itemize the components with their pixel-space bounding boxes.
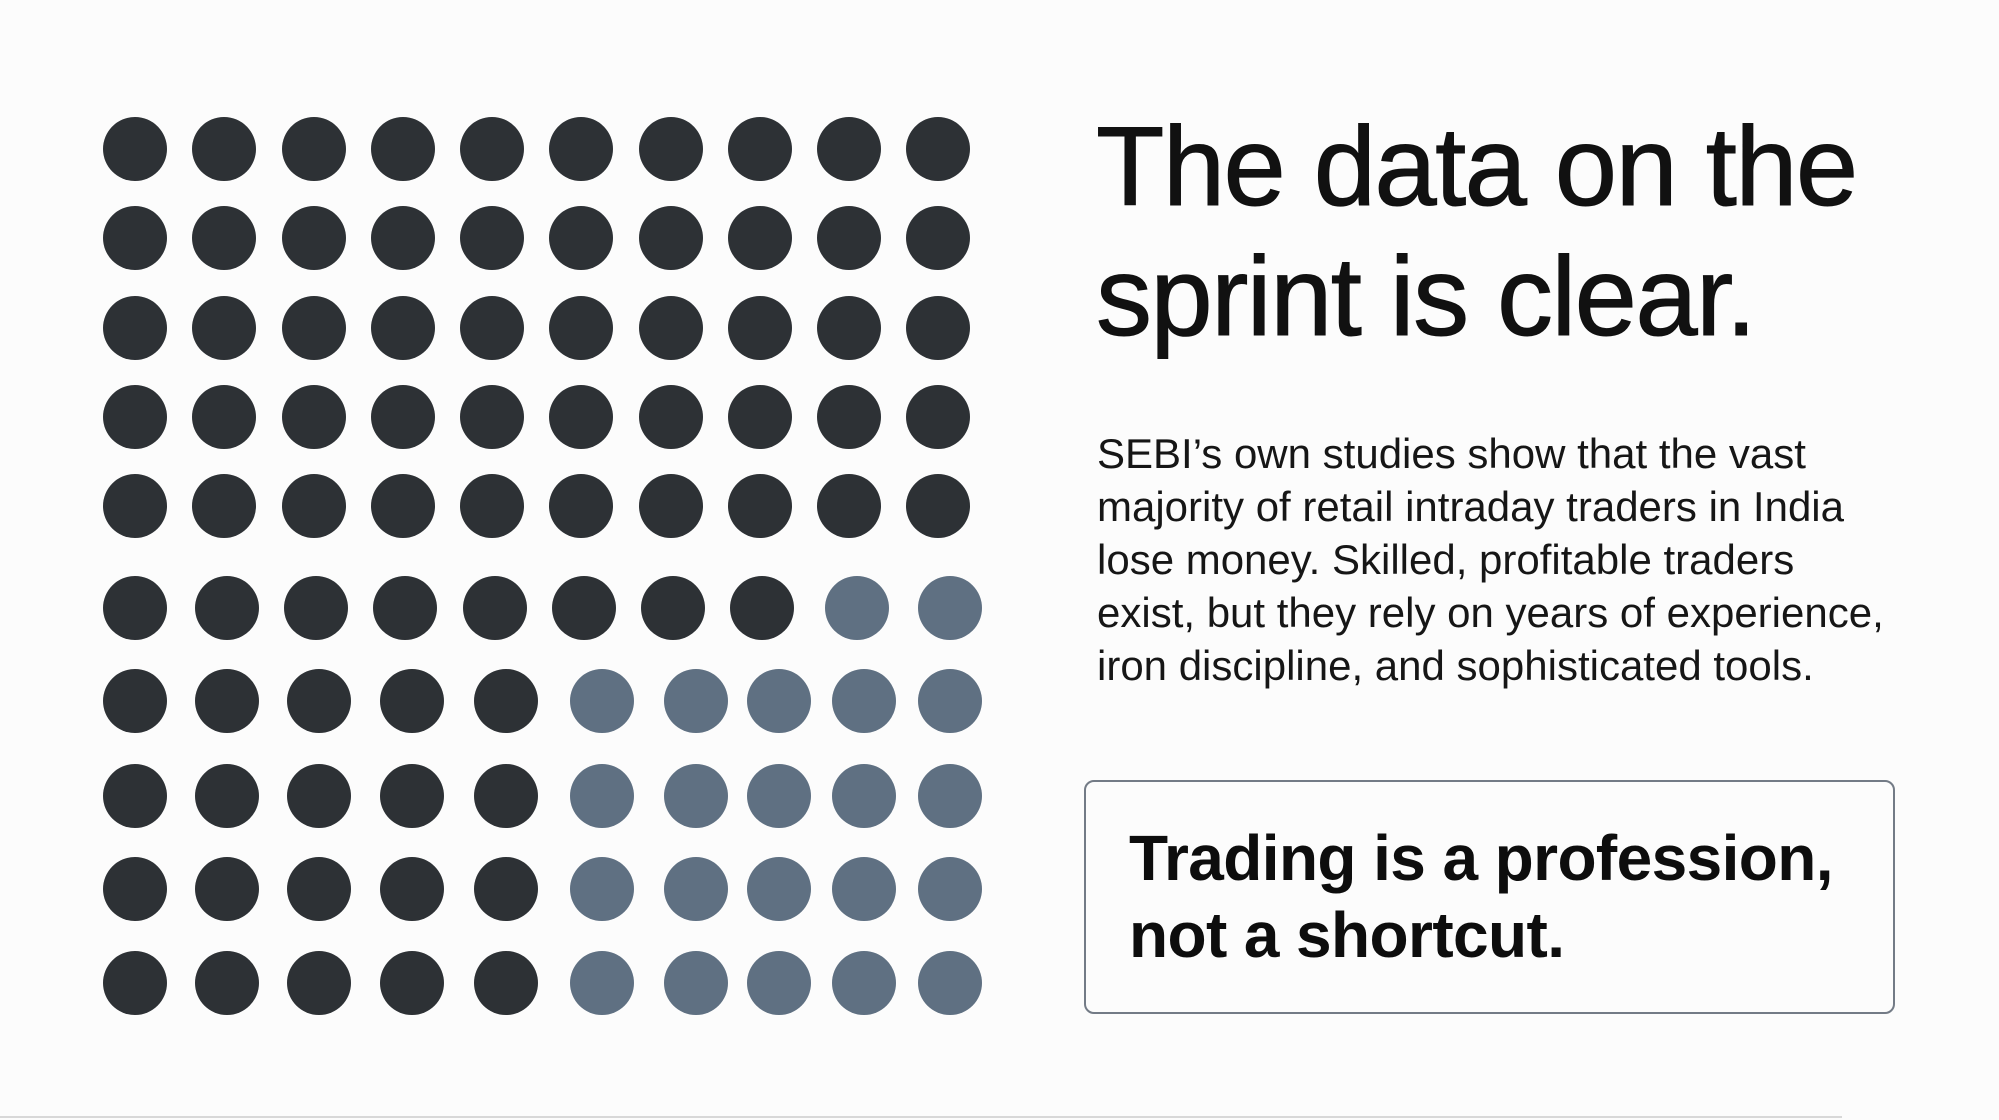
body text: exist, but they rely on years of experience, [1097,589,1884,636]
callout box [1084,780,1895,1014]
body text: SEBI’s own studies show that the vast [1097,430,1806,477]
title: sprint is clear. [1096,234,1755,359]
callout text [1129,822,1833,971]
callout text: not a shortcut. [1129,899,1564,971]
body text: majority of retail intraday traders in India [1097,483,1844,530]
body text [1097,430,1884,689]
body text: iron discipline, and sophisticated tools. [1097,642,1814,689]
title [1096,104,1857,359]
body text: lose money. Skilled, profitable traders [1097,536,1794,583]
callout text: Trading is a profession, [1129,822,1833,894]
dot grid chart [103,117,982,1015]
title: The data on the [1096,104,1857,229]
